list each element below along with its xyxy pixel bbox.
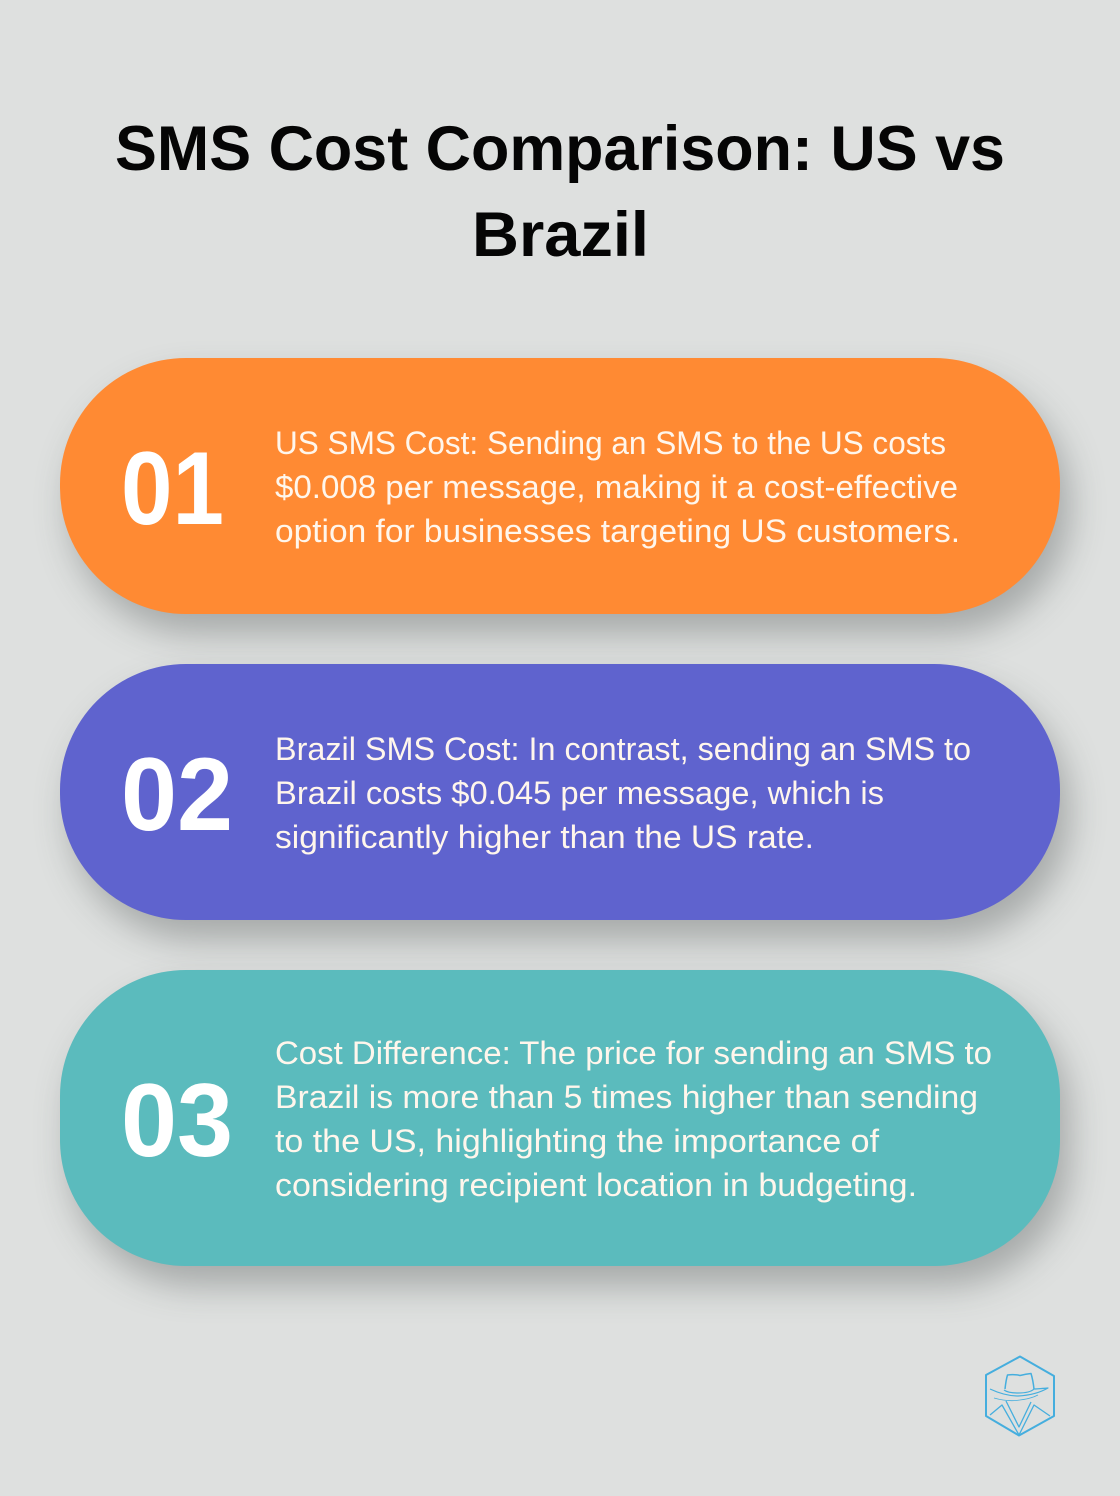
- text block: step 01: [275, 425, 960, 549]
- icon: hexagon spy logo: [985, 1356, 1055, 1436]
- title: Brazil: [472, 200, 649, 270]
- text block: step 02: significantly higher than the US rate.: [275, 819, 814, 855]
- text block: step 03: Brazil is more than 5 times higher than sending: [275, 1079, 978, 1115]
- text block: step 03: [275, 1035, 992, 1203]
- text block: step 03: Cost Difference: The price for sending an SMS to: [275, 1035, 992, 1071]
- text block: step 02: [275, 731, 971, 855]
- text block: step 02: Brazil SMS Cost: In contrast, sending an SMS to: [275, 731, 971, 767]
- text block: step 03: considering recipient location in budgeting.: [275, 1167, 917, 1203]
- step number 02: 02: [121, 737, 233, 853]
- title: [115, 114, 1005, 270]
- text block: step 02: Brazil costs $0.045 per message, which is: [275, 775, 884, 811]
- step number 03: 03: [121, 1063, 233, 1179]
- step number 01: 01: [121, 431, 224, 547]
- text block: step 01: US SMS Cost: Sending an SMS to the US costs: [275, 425, 946, 461]
- panel: step 03 cost difference: [60, 970, 1060, 1266]
- text block: step 01: option for businesses targeting US customers.: [275, 513, 960, 549]
- text block: step 01: $0.008 per message, making it a cost-effective: [275, 469, 958, 505]
- title: SMS Cost Comparison: US vs: [115, 114, 1005, 184]
- text block: step 03: to the US, highlighting the importance of: [275, 1123, 879, 1159]
- panel: step 01 US SMS cost: [60, 358, 1060, 614]
- panel: step 02 Brazil SMS cost: [60, 664, 1060, 920]
